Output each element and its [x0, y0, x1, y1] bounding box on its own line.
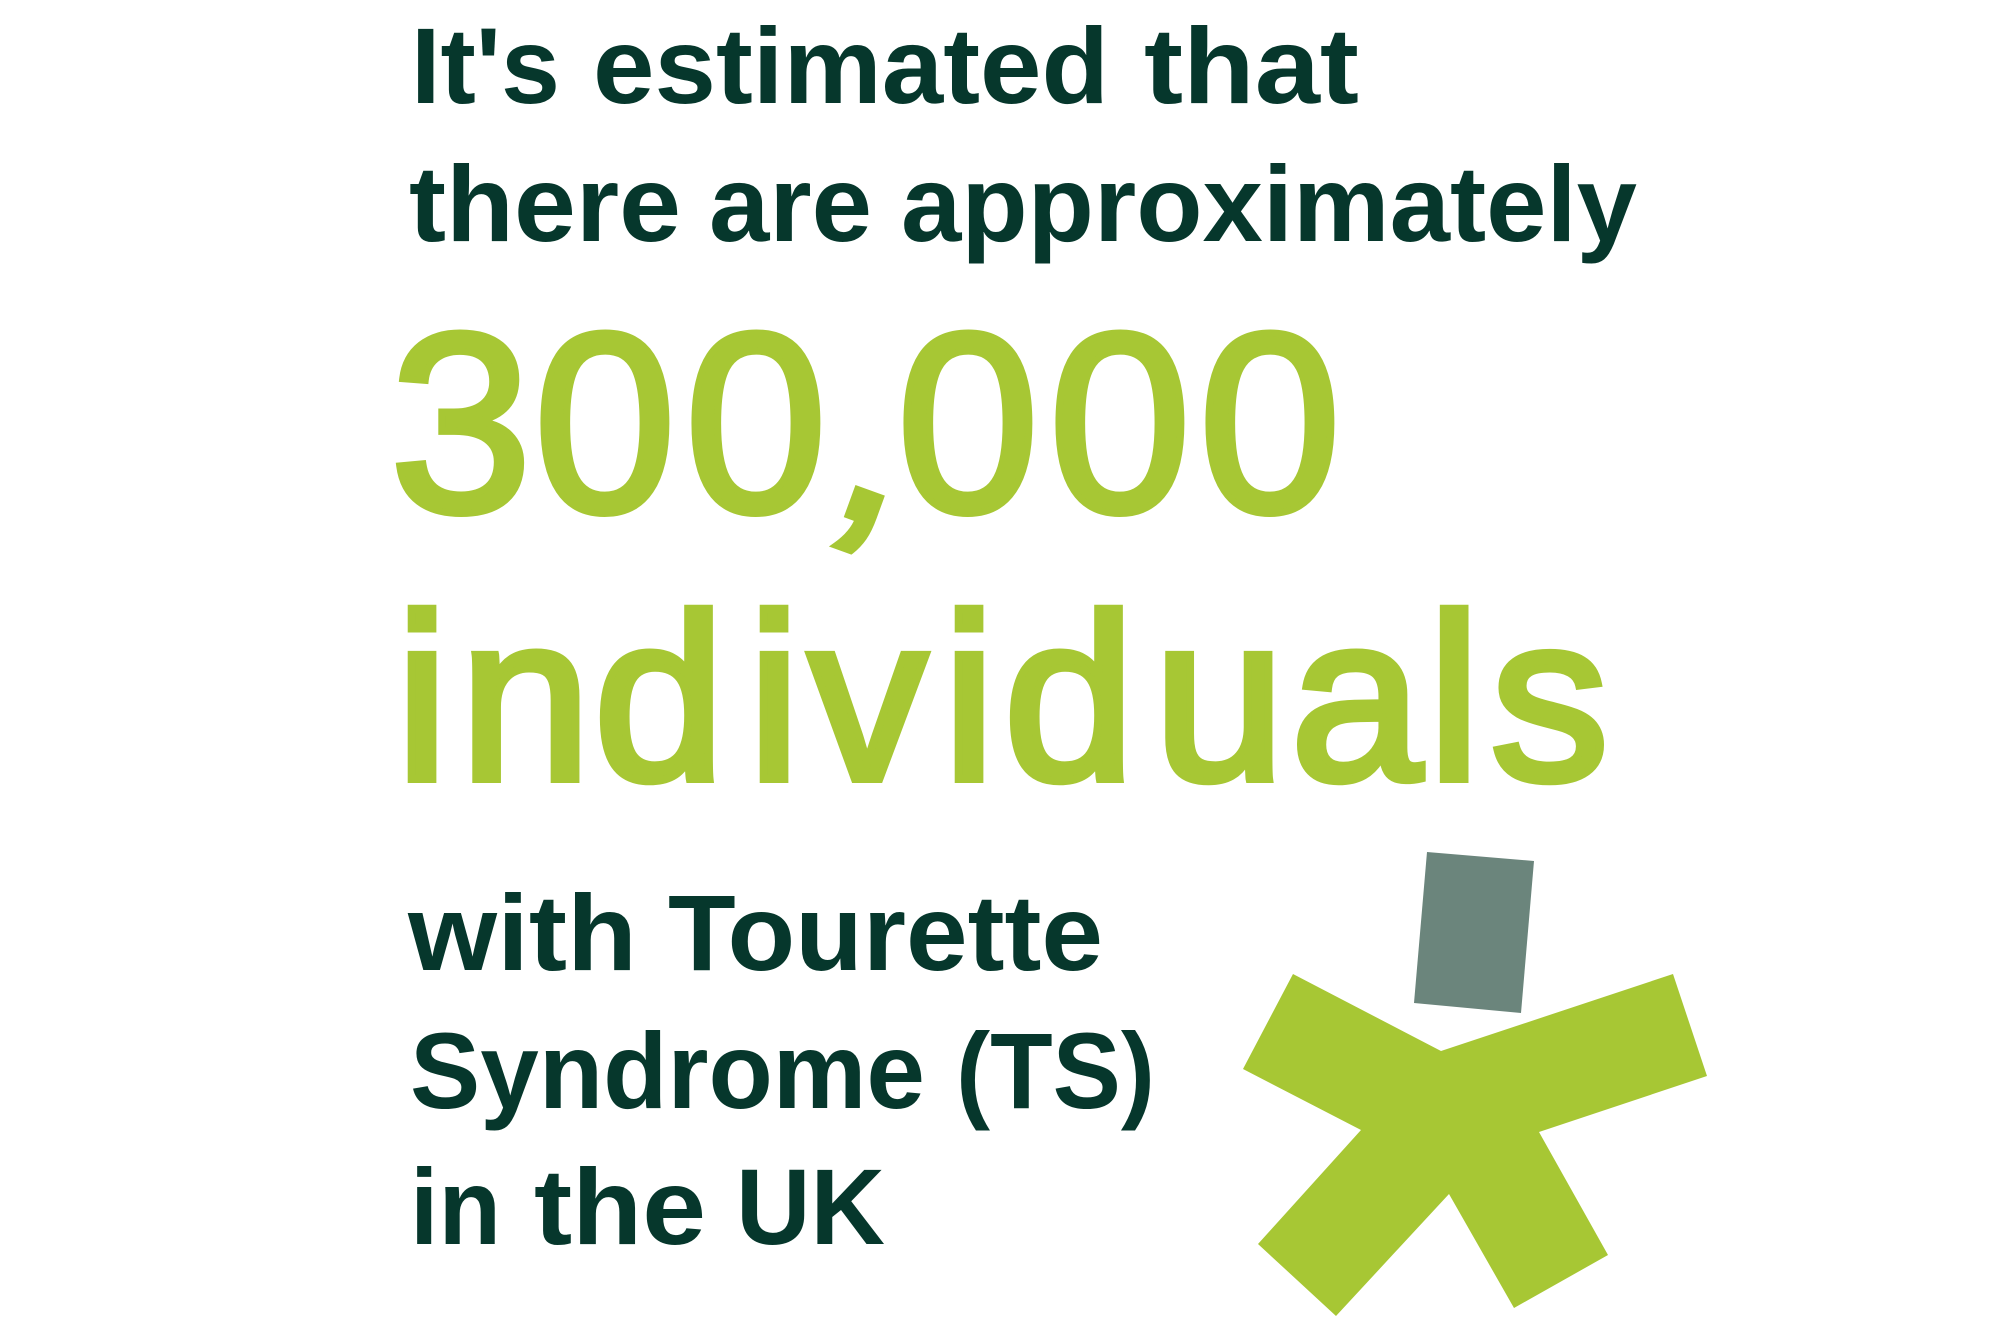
big word: individuals: individuals	[396, 566, 1608, 829]
intro text: that	[1144, 5, 1359, 126]
intro text: there	[409, 143, 681, 264]
icon: green asterisk body	[1243, 974, 1707, 1316]
closing text: in	[410, 1146, 501, 1267]
icon: asterisk person	[1243, 852, 1707, 1316]
intro text: estimated	[593, 5, 1109, 126]
intro text: approximately	[901, 143, 1637, 264]
closing text: Syndrome	[410, 1010, 925, 1131]
closing text	[407, 872, 1155, 1267]
icon: person head	[1414, 852, 1534, 1013]
big number: 300,000: 300,000	[390, 281, 1341, 583]
closing text: UK	[736, 1146, 885, 1267]
closing text: Tourette	[668, 872, 1103, 993]
intro text	[409, 5, 1637, 264]
closing text: (TS)	[956, 1010, 1155, 1131]
closing text: the	[534, 1146, 706, 1267]
closing text: with	[407, 872, 637, 993]
intro text: are	[709, 143, 872, 264]
intro text: It's	[411, 5, 560, 126]
